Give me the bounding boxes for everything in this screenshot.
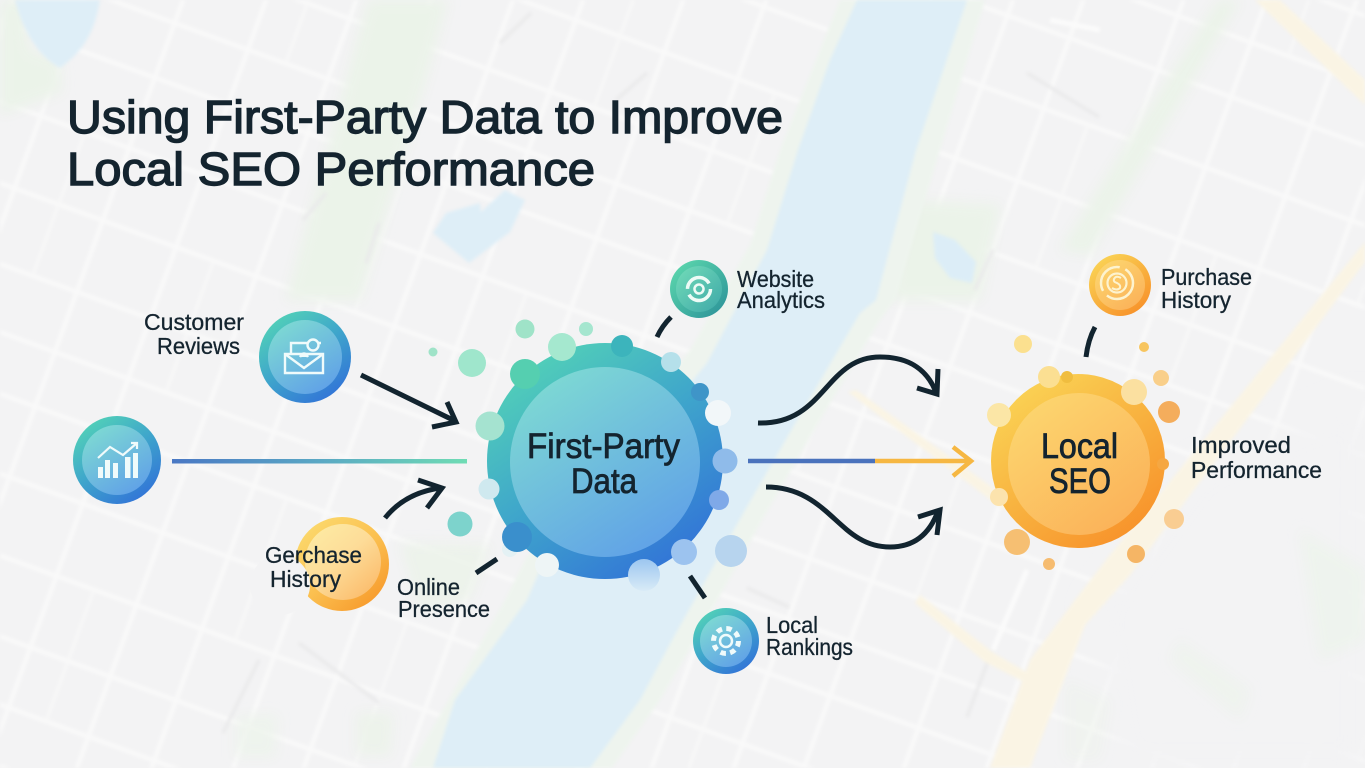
hub label <box>1041 427 1118 501</box>
hub label: Data <box>571 462 637 501</box>
icon: website analytics badge <box>670 260 728 318</box>
arrow: chart line to first-party data <box>172 459 467 464</box>
label: purchase history: Purchase <box>1161 264 1252 290</box>
label: website analytics: Website <box>737 266 814 292</box>
label: customer reviews <box>144 309 244 359</box>
connector: online presence <box>476 559 497 573</box>
icon: gerchase history badge <box>250 517 389 615</box>
icon: customer reviews badge <box>259 311 351 403</box>
hub label: Local <box>1041 427 1118 466</box>
label: customer reviews: Customer <box>144 309 244 335</box>
title: Using First-Party Data to Improve <box>67 91 783 143</box>
connector: website analytics <box>657 317 671 337</box>
lake: centre <box>433 190 525 263</box>
icon: chart badge <box>73 416 161 504</box>
label: website analytics: Analytics <box>737 287 825 313</box>
hub label <box>527 427 680 501</box>
river bank <box>410 0 985 768</box>
label: gerchase history: Gerchase <box>265 542 362 568</box>
label: improved performance: Performance <box>1191 457 1322 483</box>
arrow: upper curve to local seo <box>758 357 938 423</box>
label: online presence: Presence <box>398 596 490 622</box>
label: gerchase history <box>265 542 362 592</box>
hub label: First-Party <box>527 427 680 466</box>
hub: local seo <box>987 335 1184 570</box>
label: customer reviews: Reviews <box>157 333 240 359</box>
hub: first-party data <box>428 320 747 591</box>
arrow: reviews to first-party data <box>361 375 456 427</box>
arrow: gerchase to first-party data <box>385 480 442 518</box>
label: local rankings: Rankings <box>766 634 853 660</box>
title: Local SEO Performance <box>67 143 595 195</box>
hub label: SEO <box>1049 462 1111 501</box>
lake: top left <box>15 0 100 68</box>
label: website analytics <box>737 266 825 313</box>
lake: right <box>933 232 976 283</box>
arrow: lower curve to local seo <box>766 487 940 547</box>
label: gerchase history: History <box>270 566 341 592</box>
arrow: middle line to local seo <box>748 447 971 476</box>
label: purchase history: History <box>1161 287 1231 313</box>
connector: purchase history <box>1086 327 1095 357</box>
river <box>433 0 967 768</box>
icon: purchase history badge <box>1089 254 1151 316</box>
label: improved performance: Improved <box>1191 432 1291 458</box>
label: local rankings <box>766 612 853 660</box>
label: purchase history <box>1161 264 1252 313</box>
faint road details <box>223 13 1099 733</box>
yellow roads <box>848 0 1365 768</box>
label: online presence <box>397 574 490 622</box>
label: local rankings: Local <box>766 612 818 638</box>
bubbles: first-party data <box>428 320 747 591</box>
icon: local rankings badge <box>693 608 759 674</box>
label: improved performance <box>1191 432 1322 483</box>
bubbles: local seo <box>987 335 1184 570</box>
label: online presence: Online <box>397 574 460 600</box>
title <box>67 91 783 195</box>
connector: local rankings <box>690 576 705 598</box>
